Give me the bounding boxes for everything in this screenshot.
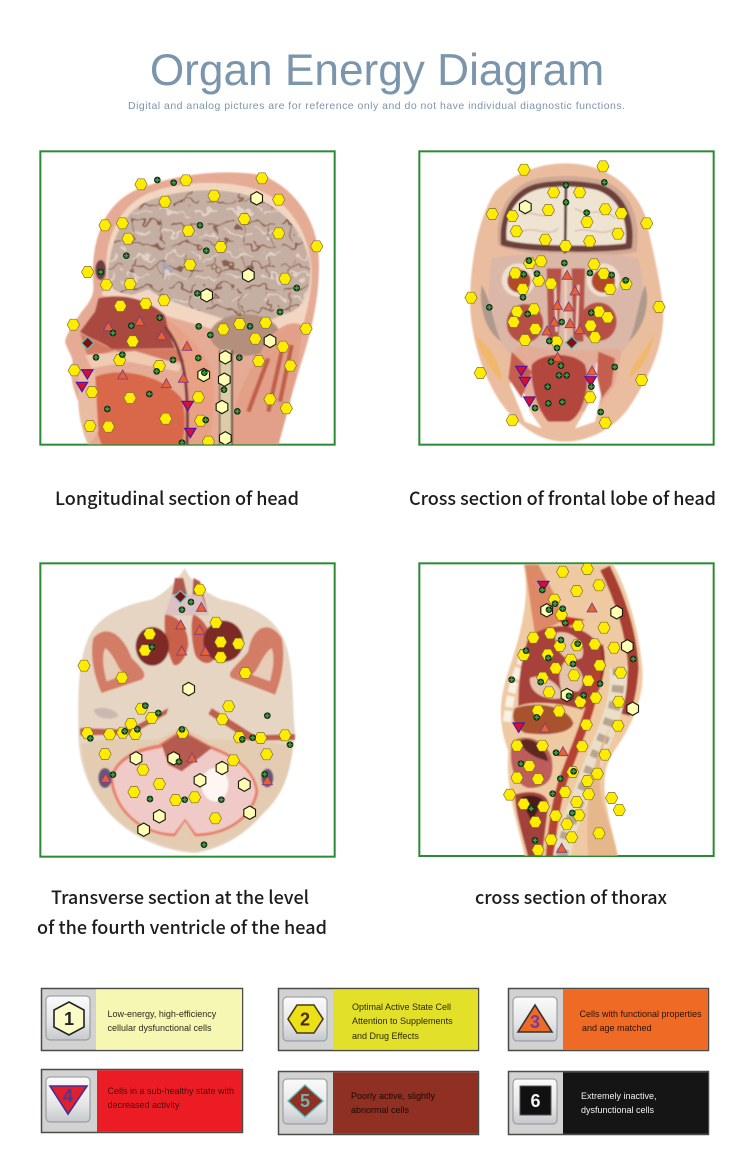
text: cellular dysfunctional cells (108, 1023, 212, 1033)
markers: optimal state hexagons (67, 173, 323, 447)
text: decreased activity (108, 1100, 180, 1110)
markers: age-matched triangles (101, 602, 272, 785)
legend card 5 (278, 1072, 478, 1134)
icon: brown diamond: 5 (300, 1091, 310, 1111)
icon: red inverted triangle (50, 1086, 87, 1114)
icon: orange triangle: 3 (530, 1012, 540, 1032)
icon: low-energy hexagon: 1 (64, 1009, 74, 1029)
anatomy: thorax section (501, 565, 643, 858)
text: and Drug Effects (352, 1031, 419, 1041)
icon: red inverted triangle: 4 (63, 1086, 73, 1106)
text: Cells in a sub-healthy state with (108, 1086, 234, 1096)
text: dysfunctional cells (581, 1105, 655, 1115)
markers: optimal state hexagons (503, 563, 627, 855)
panel: cross section of thorax (419, 563, 714, 858)
markers: sub-healthy triangles (516, 366, 596, 406)
icon: orange triangle (518, 1005, 552, 1032)
markers: dark crosses (486, 179, 629, 415)
caption: frontal lobe cross section: Cross section of frontal lobe of head (409, 485, 716, 511)
markers: dark crosses (93, 177, 300, 446)
legend card 3 (508, 988, 708, 1050)
marker: poorly active diamond (174, 591, 186, 603)
caption: transverse section: of the fourth ventricle of the head (37, 914, 327, 940)
text: Extremely inactive, (581, 1091, 657, 1101)
markers: low-energy hexagons (130, 682, 255, 836)
icon: low-energy hexagon (54, 1002, 84, 1035)
text: abnormal cells (351, 1105, 410, 1115)
marker: poorly active diamond (82, 337, 94, 349)
icon: brown diamond (288, 1085, 323, 1117)
legend card 6 (508, 1072, 708, 1134)
markers: optimal state hexagons (465, 161, 665, 428)
text: Optimal Active State Cell (352, 1002, 451, 1012)
brain folds (108, 191, 310, 316)
legend card 4 (42, 1070, 242, 1132)
markers: low-energy hexagons (198, 192, 276, 445)
panel: cross section of frontal lobe (419, 151, 714, 445)
anatomy: frontal head section (470, 163, 663, 442)
text: Cells with functional properties (580, 1009, 702, 1019)
caption: transverse section: Transverse section at the level (51, 884, 309, 910)
markers: sub-healthy triangles (76, 370, 196, 438)
title: Organ Energy Diagram (150, 46, 604, 95)
legend card 2 (278, 988, 478, 1050)
text: Poorly active, slightly (351, 1091, 436, 1101)
caption: cross section of thorax: cross section of thorax (475, 884, 668, 910)
markers: dark crosses (508, 587, 637, 844)
markers: low-energy hexagon (519, 200, 531, 214)
panel: transverse section at fourth ventricle (40, 563, 335, 857)
icon: optimal hexagon: 2 (300, 1010, 310, 1030)
markers: age-matched triangles (542, 270, 597, 375)
icon: black square: 6 (530, 1091, 541, 1111)
markers: age-matched triangles (103, 316, 192, 388)
caption: transverse section (37, 884, 327, 940)
subtitle disclaimer: Digital and analog pictures are for reference only and do not have individual diagnostic functions. (128, 100, 625, 112)
markers: optimal state hexagons (78, 584, 291, 824)
markers: dark crosses (87, 599, 293, 848)
text: and age matched (582, 1023, 652, 1033)
text: Low-energy, high-efficiency (108, 1009, 217, 1019)
marker: poorly active diamond (566, 337, 578, 349)
legend card 1 (42, 988, 242, 1050)
markers: age-matched triangles (540, 603, 597, 852)
panel: longitudinal section of head (40, 151, 335, 447)
markers: low-energy hexagons (541, 604, 638, 715)
markers: sub-healthy triangles (513, 581, 549, 732)
icon: optimal hexagon (288, 1005, 323, 1033)
caption: longitudinal section: Longitudinal section of head (55, 485, 299, 511)
anatomy: transverse head section (78, 568, 295, 853)
text: Attention to Supplements (352, 1016, 453, 1026)
icon: black square (520, 1086, 551, 1115)
anatomy: sagittal head section (65, 172, 319, 445)
